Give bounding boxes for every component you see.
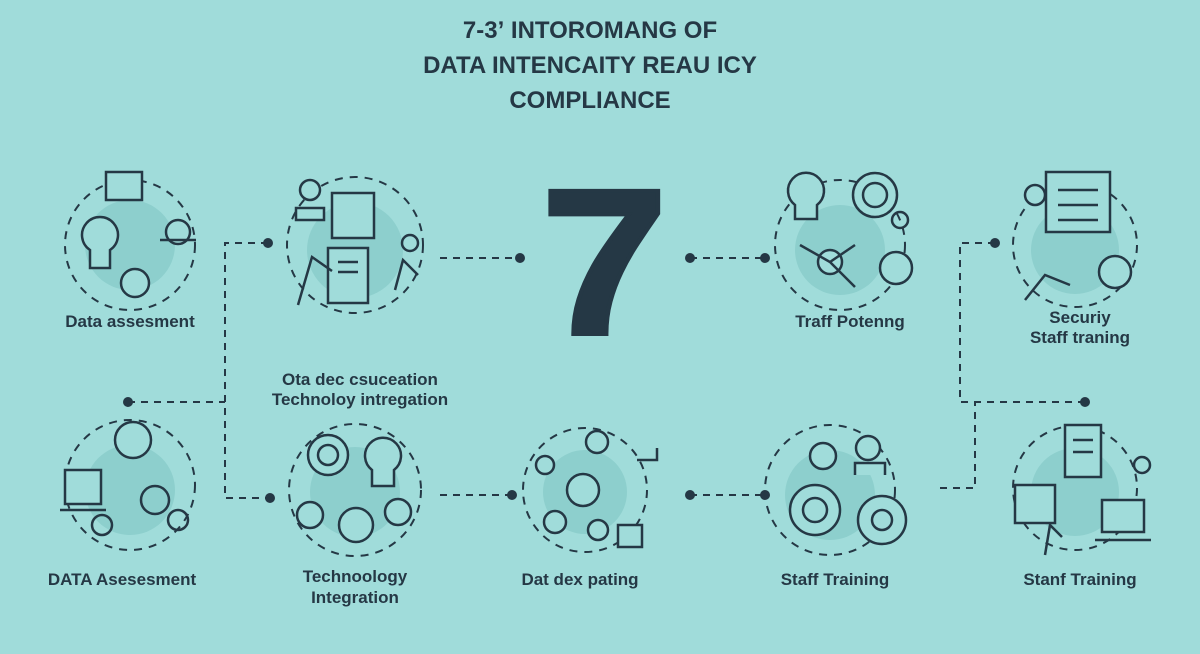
label: technology integration top: Ota dec csuceation — [282, 370, 438, 389]
icon: data assessment 2 — [60, 420, 195, 550]
title — [423, 17, 757, 114]
icon: staff training 2 — [1013, 425, 1151, 555]
label: security: Staff traning — [1030, 328, 1130, 347]
label: staff training: Staff Training — [781, 570, 889, 589]
label: traffic: Traff Potenng — [795, 312, 905, 331]
title: DATA INTENCAITY REAU ICY — [423, 52, 757, 79]
icon: data assessment — [65, 172, 196, 310]
label: technology integration: Integration — [311, 588, 399, 607]
title: 7-3ʼ INTOROMANG OF — [463, 17, 717, 44]
icon: data indexing — [523, 428, 657, 552]
title: COMPLIANCE — [509, 87, 671, 114]
icon: staff training — [765, 425, 906, 555]
number 7: 7 — [541, 147, 668, 379]
label: technology integration — [302, 567, 408, 607]
icon: technology — [287, 177, 423, 313]
label: security — [1030, 308, 1130, 347]
label: technology integration top — [272, 370, 448, 409]
icon: security — [1013, 172, 1137, 307]
connector dots — [123, 238, 1090, 503]
label: data indexing: Dat dex pating — [521, 570, 639, 589]
label: data assessment: Data assesment — [65, 312, 195, 331]
label: security: Securiy — [1049, 308, 1111, 327]
label: technology integration: Technoology — [303, 567, 407, 586]
label: staff training 2: Stanf Training — [1023, 570, 1137, 589]
connectors — [128, 243, 1085, 498]
label: technology integration top: Technoloy intregation — [272, 390, 448, 409]
label: DATA assessment: DATA Asesesment — [48, 570, 196, 589]
icon: technology integration — [289, 424, 421, 556]
icon: traffic — [775, 173, 912, 310]
